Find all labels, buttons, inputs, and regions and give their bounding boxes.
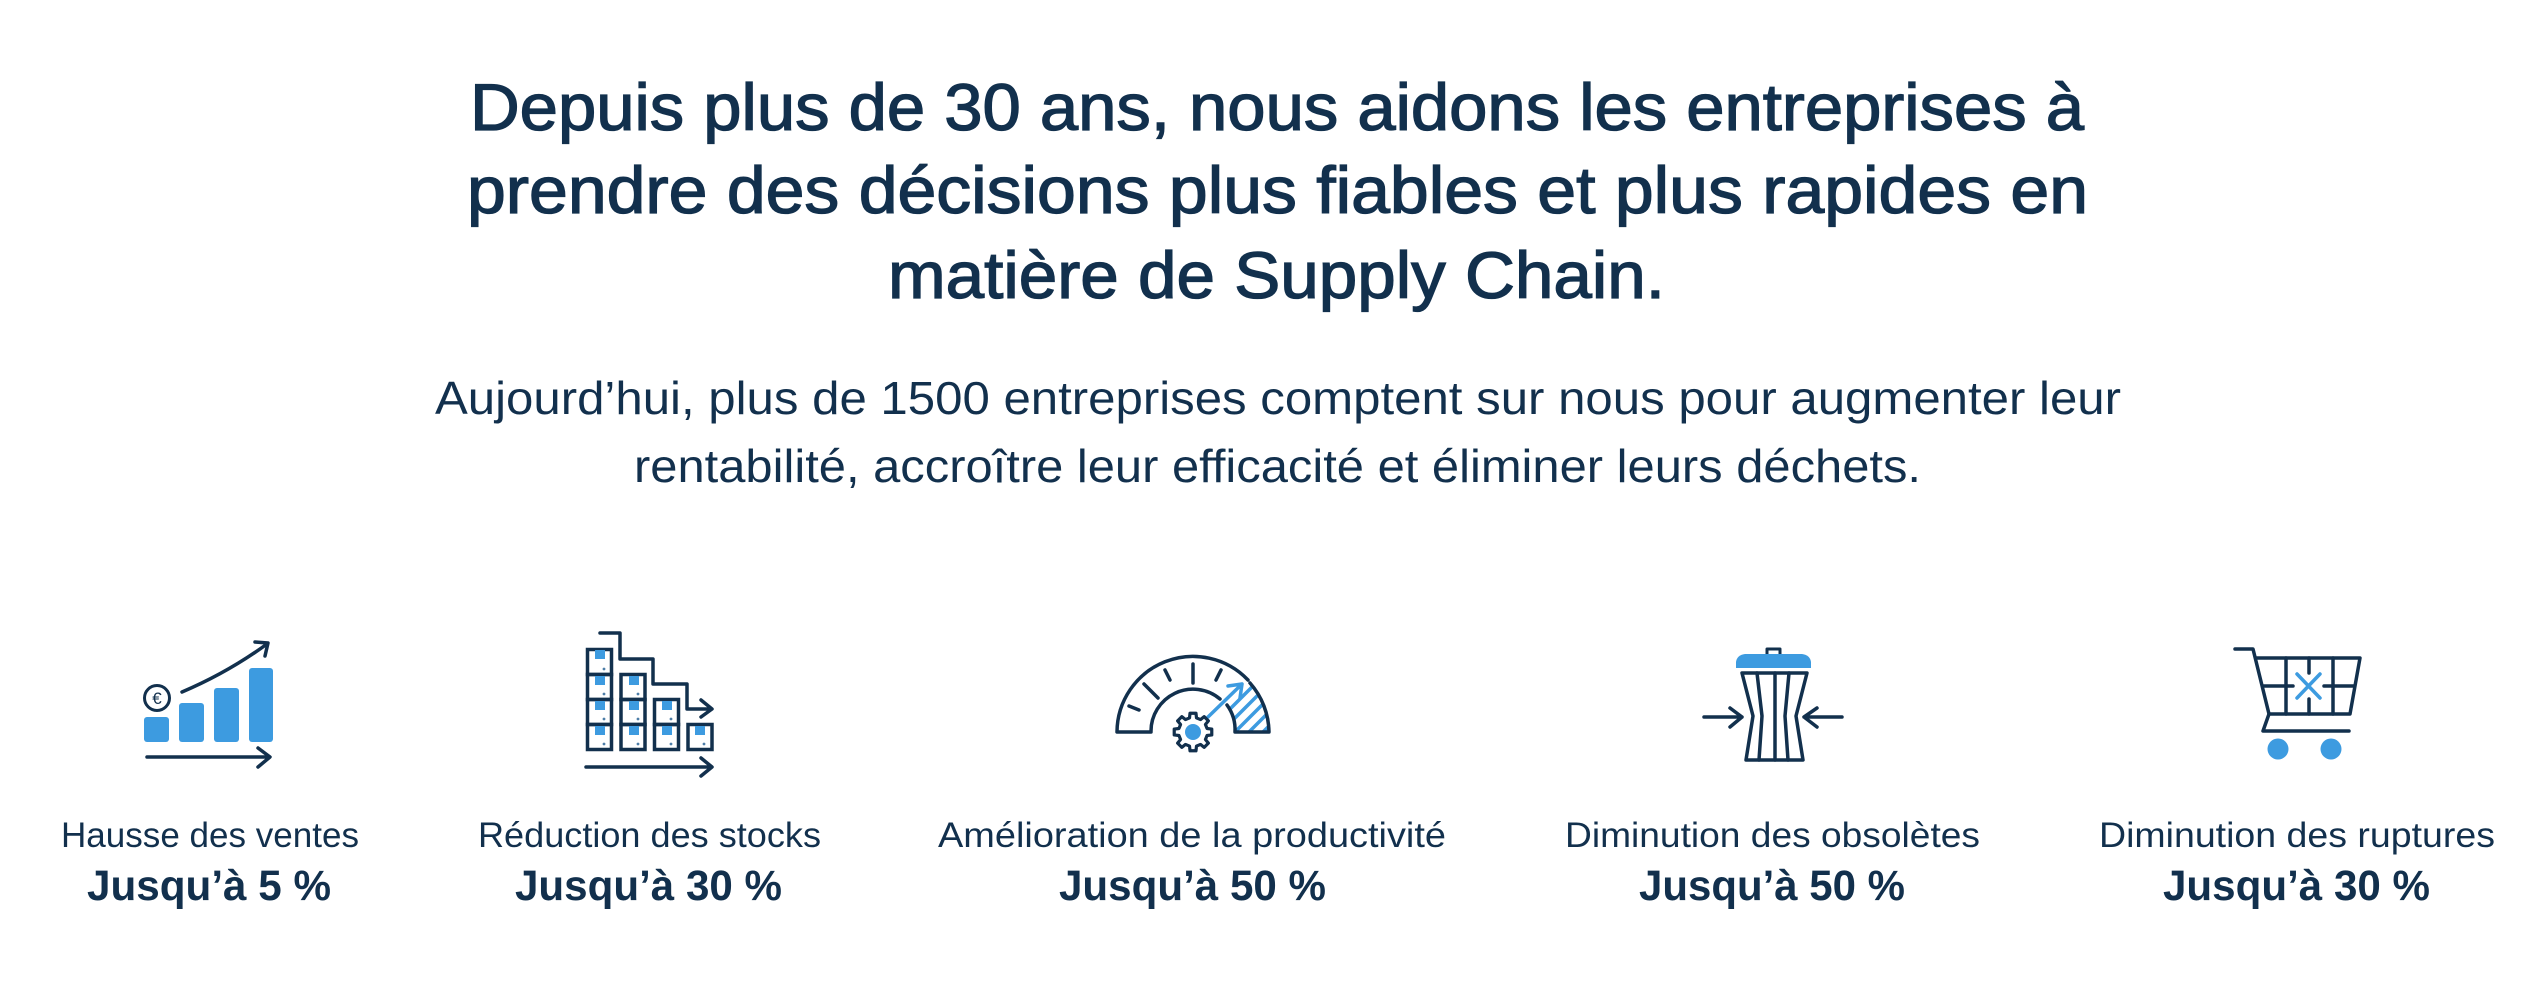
value: Jusqu’à 30 %	[515, 862, 782, 910]
panel: diminution des ruptures	[2099, 649, 2495, 910]
icon: sales growth chart	[144, 642, 273, 767]
panel: amélioration de la productivité	[938, 656, 1446, 910]
icon: decreasing stock boxes	[586, 633, 712, 776]
value: Jusqu’à 5 %	[87, 862, 331, 910]
title	[467, 70, 2088, 312]
label: Réduction des stocks	[478, 816, 821, 855]
value: Jusqu’à 50 %	[1639, 862, 1905, 910]
panel: réduction des stocks	[478, 633, 821, 910]
icon: shopping cart	[2235, 649, 2360, 760]
panel: diminution des obsolètes	[1565, 649, 1980, 910]
label: Amélioration de la productivité	[938, 816, 1446, 855]
value: Jusqu’à 50 %	[1059, 862, 1326, 910]
value: Jusqu’à 30 %	[2163, 862, 2430, 910]
label: Diminution des ruptures	[2099, 816, 2495, 855]
title: prendre des décisions plus fiables et plus rapides en	[467, 153, 2088, 227]
label: Hausse des ventes	[61, 816, 359, 855]
title: Depuis plus de 30 ans, nous aidons les entreprises à	[470, 70, 2084, 144]
intro paragraph	[435, 372, 2121, 492]
icon: compressed trash can	[1704, 649, 1842, 760]
label: Diminution des obsolètes	[1565, 816, 1980, 855]
panel: hausse des ventes	[61, 642, 359, 910]
icon: gauge with gear	[1115, 654, 1271, 752]
icon: sales growth chart: €	[152, 689, 162, 708]
intro paragraph: rentabilité, accroître leur efficacité et éliminer leurs déchets.	[634, 440, 1921, 492]
title: matière de Supply Chain.	[888, 238, 1665, 312]
intro paragraph: Aujourd’hui, plus de 1500 entreprises comptent sur nous pour augmenter leur	[435, 372, 2121, 424]
